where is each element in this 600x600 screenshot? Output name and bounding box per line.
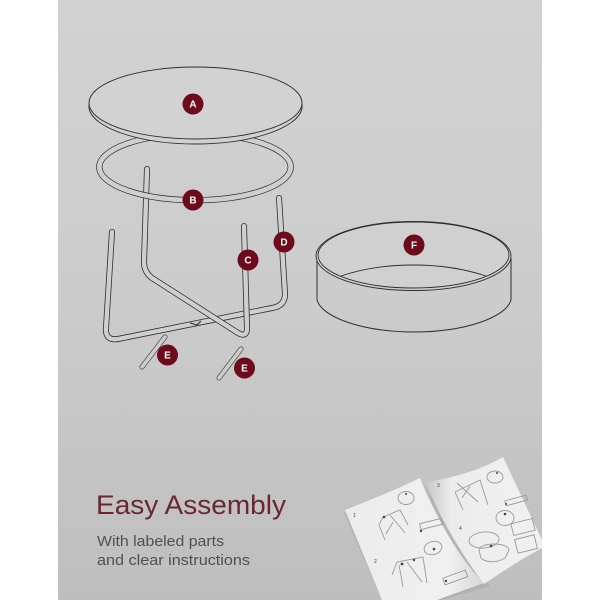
badge E right: E — [241, 364, 248, 375]
manual step numbers: 4 — [459, 526, 462, 532]
badge C: C — [244, 256, 252, 267]
tray F — [316, 222, 511, 332]
center bracket — [190, 321, 201, 325]
manual dots — [383, 472, 507, 582]
badge A — [182, 94, 204, 114]
manual step numbers: 3 — [437, 483, 440, 489]
badge D — [274, 232, 294, 252]
badge F — [404, 234, 424, 256]
badge A: A — [189, 100, 197, 111]
manual drawings — [379, 471, 537, 587]
leg D — [106, 198, 285, 339]
manual step numbers: 2 — [374, 559, 377, 565]
right page — [426, 457, 542, 584]
bracket E left — [142, 337, 165, 367]
manual step numbers: 1 — [353, 513, 356, 519]
badge E left: E — [164, 351, 171, 362]
badge F: F — [411, 241, 417, 252]
badge D: D — [280, 238, 288, 249]
tabletop A — [89, 67, 302, 144]
badge C — [238, 250, 258, 270]
left page — [345, 478, 484, 600]
ring B — [99, 134, 291, 200]
instruction booklet — [344, 457, 542, 600]
heading: Easy Assembly — [96, 490, 287, 520]
badge B — [182, 190, 204, 210]
badge B: B — [189, 196, 197, 207]
badge E left — [157, 344, 178, 366]
subtitle — [97, 533, 250, 569]
bracket E right — [219, 349, 241, 378]
leg C — [144, 169, 247, 335]
subtitle: and clear instructions — [97, 552, 250, 569]
subtitle: With labeled parts — [97, 533, 224, 550]
badge E right — [234, 358, 255, 378]
manual step numbers — [353, 483, 462, 565]
